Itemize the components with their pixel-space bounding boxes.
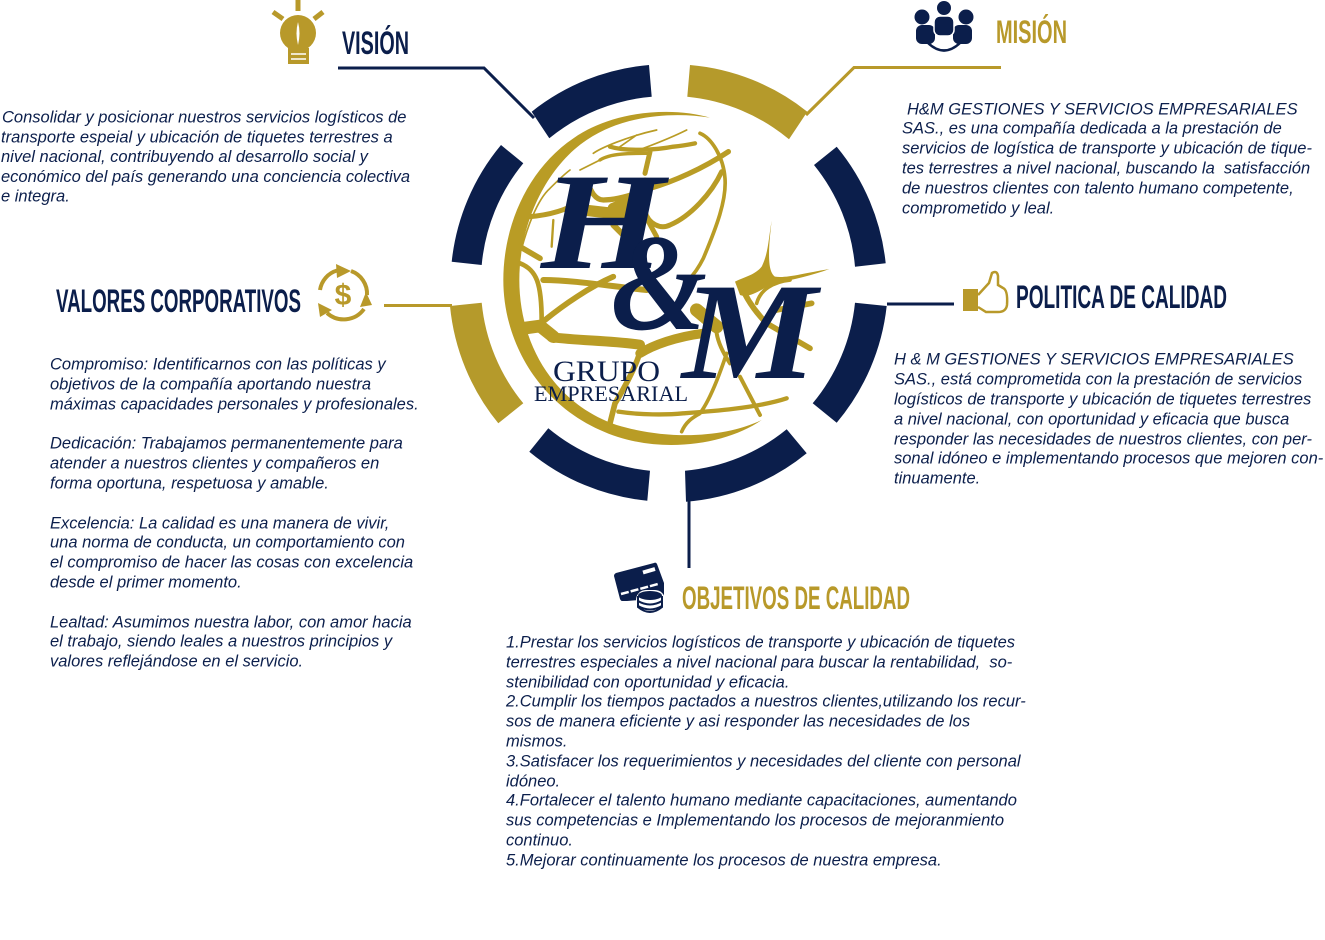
text: valores corporativos: Lealtad: Asumimos nuestra labor, con amor hacia bbox=[50, 613, 412, 631]
text: política de calidad: SAS., está comprometida con la prestación de servicios bbox=[894, 370, 1302, 388]
text: objetivos de calidad: 4.Fortalecer el talento humano mediante capacitaciones, aumentando bbox=[506, 791, 1017, 809]
logo: H&M globe bbox=[503, 112, 829, 445]
text: valores corporativos: valores reflejándose en el servicio. bbox=[50, 652, 303, 670]
text: visión: Consolidar y posicionar nuestros servicios logísticos de bbox=[2, 108, 406, 126]
text: valores corporativos: Compromiso: Identificarnos con las políticas y bbox=[50, 355, 387, 373]
text: valores corporativos: forma oportuna, respetuosa y amable. bbox=[50, 474, 329, 492]
text: valores corporativos: una norma de conducta, un comportamiento con bbox=[50, 533, 405, 551]
letter H: H bbox=[539, 145, 669, 298]
ring of eight segments bbox=[450, 65, 887, 502]
connector: misión bbox=[806, 68, 1001, 115]
text: visión: transporte espeial y ubicación de tiquetes terrestres a bbox=[1, 128, 393, 146]
text: valores corporativos bbox=[50, 355, 419, 670]
text: objetivos de calidad: idóneo. bbox=[506, 772, 560, 790]
icon: dollar cycle bbox=[318, 264, 372, 319]
icon: thumbs up bbox=[963, 272, 1007, 312]
text: visión: e integra. bbox=[1, 187, 70, 205]
text: misión: comprometido y leal. bbox=[902, 199, 1054, 217]
text: misión: de nuestros clientes con talento humano competente, bbox=[902, 179, 1294, 197]
text: política de calidad: sonal idóneo e implementando procesos que mejoren con- bbox=[894, 449, 1324, 467]
text: valores corporativos: Excelencia: La calidad es una manera de vivir, bbox=[50, 514, 389, 532]
heading: misión: MISIÓN bbox=[996, 14, 1067, 50]
text: valores corporativos: máximas capacidades personales y profesionales. bbox=[50, 395, 419, 413]
text: política de calidad: logísticos de transporte y ubicación de tiquetes terrestres bbox=[894, 390, 1311, 408]
text: valores corporativos: el compromiso de hacer las cosas con excelencia bbox=[50, 553, 413, 571]
text: objetivos de calidad: sus competencias e Implementando los procesos de mejoranmiento bbox=[506, 811, 1004, 829]
text: objetivos de calidad bbox=[505, 633, 1026, 869]
text: valores corporativos: desde el primer momento. bbox=[50, 573, 242, 591]
text: valores corporativos: el trabajo, siendo leales a nuestros principios y bbox=[50, 632, 394, 650]
icon: light bulb bbox=[273, 0, 323, 64]
text: objetivos de calidad: 1.Prestar los servicios logísticos de transporte y ubicación de tiquetes bbox=[506, 633, 1015, 651]
heading: visión: VISIÓN bbox=[342, 25, 409, 61]
text: objetivos de calidad: stenibilidad con oportunidad y eficacia. bbox=[506, 673, 789, 691]
heading: objetivos de calidad: OBJETIVOS DE CALIDAD bbox=[682, 580, 910, 616]
text: misión: SAS., es una compañía dedicada a la prestación de bbox=[902, 119, 1282, 137]
icon: card and coins bbox=[614, 563, 665, 614]
text: visión bbox=[1, 108, 410, 205]
text: visión: nivel nacional, contribuyendo al desarrollo social y bbox=[1, 148, 370, 166]
text: objetivos de calidad: 2.Cumplir los tiempos pactados a nuestros clientes,utilizando los recur- bbox=[505, 692, 1026, 710]
icon: dollar cycle: $ bbox=[335, 279, 352, 312]
text: objetivos de calidad: sos de manera eficiente y asi responder las necesidades de los bbox=[506, 712, 970, 730]
text: valores corporativos: atender a nuestros clientes y compañeros en bbox=[50, 454, 379, 472]
text: misión: tes terrestres a nivel nacional, buscando la satisfacción bbox=[902, 159, 1310, 177]
GRUPO: GRUPO bbox=[553, 355, 660, 388]
text: objetivos de calidad: mismos. bbox=[506, 732, 567, 750]
letter M: M bbox=[680, 255, 822, 408]
connector: política de calidad bbox=[887, 302, 954, 306]
text: política de calidad: H & M GESTIONES Y SERVICIOS EMPRESARIALES bbox=[894, 350, 1294, 368]
text: visión: económico del país generando una conciencia colectiva bbox=[1, 168, 410, 186]
text: misión: H&M GESTIONES Y SERVICIOS EMPRESARIALES bbox=[907, 100, 1298, 118]
text: política de calidad: responder las necesidades de nuestros clientes, con per- bbox=[894, 430, 1312, 448]
text: objetivos de calidad: terrestres especiales a nivel nacional para buscar la rentabilidad, so- bbox=[506, 653, 1013, 671]
connector: objetivos de calidad bbox=[688, 497, 690, 568]
ampersand: & bbox=[611, 206, 707, 359]
text: objetivos de calidad: 3.Satisfacer los requerimientos y necesidades del cliente con personal bbox=[506, 752, 1022, 770]
heading: valores corporativos: VALORES CORPORATIVOS bbox=[56, 283, 301, 319]
connector: visión bbox=[338, 68, 534, 118]
text: valores corporativos: Dedicación: Trabajamos permanentemente para bbox=[50, 434, 403, 452]
text: política de calidad: a nivel nacional, con oportunidad y eficacia que busca bbox=[894, 410, 1289, 428]
text: objetivos de calidad: 5.Mejorar continuamente los procesos de nuestra empresa. bbox=[506, 851, 942, 869]
globe network bbox=[503, 112, 829, 445]
EMPRESARIAL: EMPRESARIAL bbox=[534, 381, 688, 406]
text: política de calidad: tinuamente. bbox=[894, 469, 980, 487]
text: política de calidad bbox=[894, 350, 1324, 487]
text: valores corporativos: objetivos de la compañía aportando nuestra bbox=[50, 375, 371, 393]
text: objetivos de calidad: continuo. bbox=[506, 831, 573, 849]
text: misión: servicios de logística de transporte y ubicación de tique- bbox=[902, 139, 1312, 157]
text: misión bbox=[902, 100, 1312, 217]
icon: team bbox=[914, 1, 974, 50]
connector: valores corporativos bbox=[384, 304, 452, 307]
